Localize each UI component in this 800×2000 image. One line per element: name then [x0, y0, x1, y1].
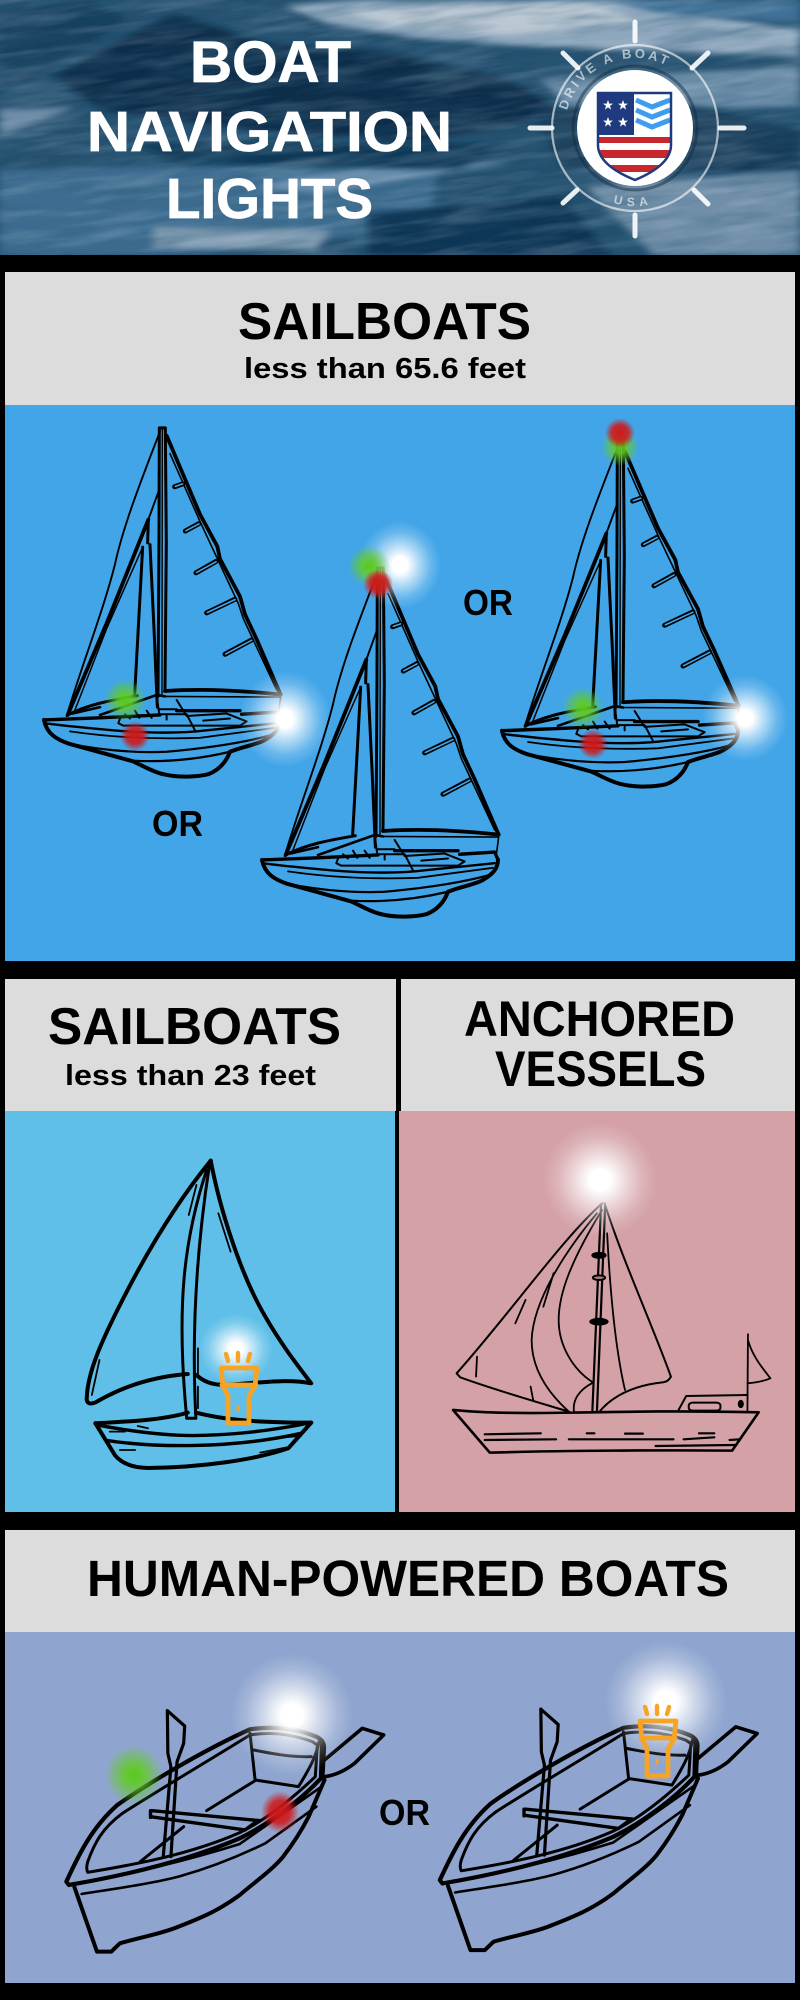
panel: human-powered boats — [5, 1530, 795, 1983]
anchored boat drawing — [453, 1203, 770, 1453]
title: NAVIGATION — [87, 100, 452, 164]
heading: sailboats 23: SAILBOATS — [48, 998, 341, 1056]
title: BOAT — [190, 30, 351, 95]
logo: ship wheel with shield: USA — [614, 195, 648, 206]
rowboat with sidelights and white light — [66, 1654, 384, 1952]
light glow on small sailboat — [199, 1314, 273, 1384]
rowboat with flashlight — [440, 1641, 757, 1950]
heading: anchored vessels — [464, 991, 735, 1097]
heading: sailboats 65.6 — [238, 293, 531, 385]
heading: sailboats 65.6: less than 65.6 feet — [244, 353, 526, 385]
panel: anchored vessels — [399, 979, 795, 1512]
or label right: OR — [463, 582, 513, 623]
icon: flashlight — [221, 1353, 257, 1423]
panel: sailboats less than 65.6 feet — [5, 272, 795, 961]
heading: anchored vessels: VESSELS — [495, 1041, 706, 1097]
sailboat with bow and stern lights — [44, 428, 331, 777]
logo: ship wheel with shield: DRIVE A BOAT — [558, 49, 670, 110]
heading: human-powered boats: HUMAN-POWERED BOATS — [87, 1550, 729, 1607]
heading: sailboats 65.6: SAILBOATS — [238, 293, 531, 351]
title: LIGHTS — [166, 167, 373, 231]
or label: OR — [379, 1792, 430, 1833]
panel: sailboats less than 23 feet — [5, 979, 396, 1512]
small sailboat drawing — [87, 1161, 311, 1468]
heading: anchored vessels: ANCHORED — [464, 991, 735, 1047]
heading: sailboats 23 — [48, 998, 341, 1092]
title — [87, 30, 452, 231]
or label left: OR — [152, 803, 203, 844]
logo: ship wheel with shield — [528, 20, 746, 238]
sailboat with masthead lights — [262, 521, 499, 917]
header: water photo banner — [0, 0, 800, 255]
masthead all-round white light — [543, 1123, 657, 1237]
heading: sailboats 23: less than 23 feet — [65, 1060, 316, 1092]
sailboat with tricolor masthead option — [502, 418, 788, 787]
